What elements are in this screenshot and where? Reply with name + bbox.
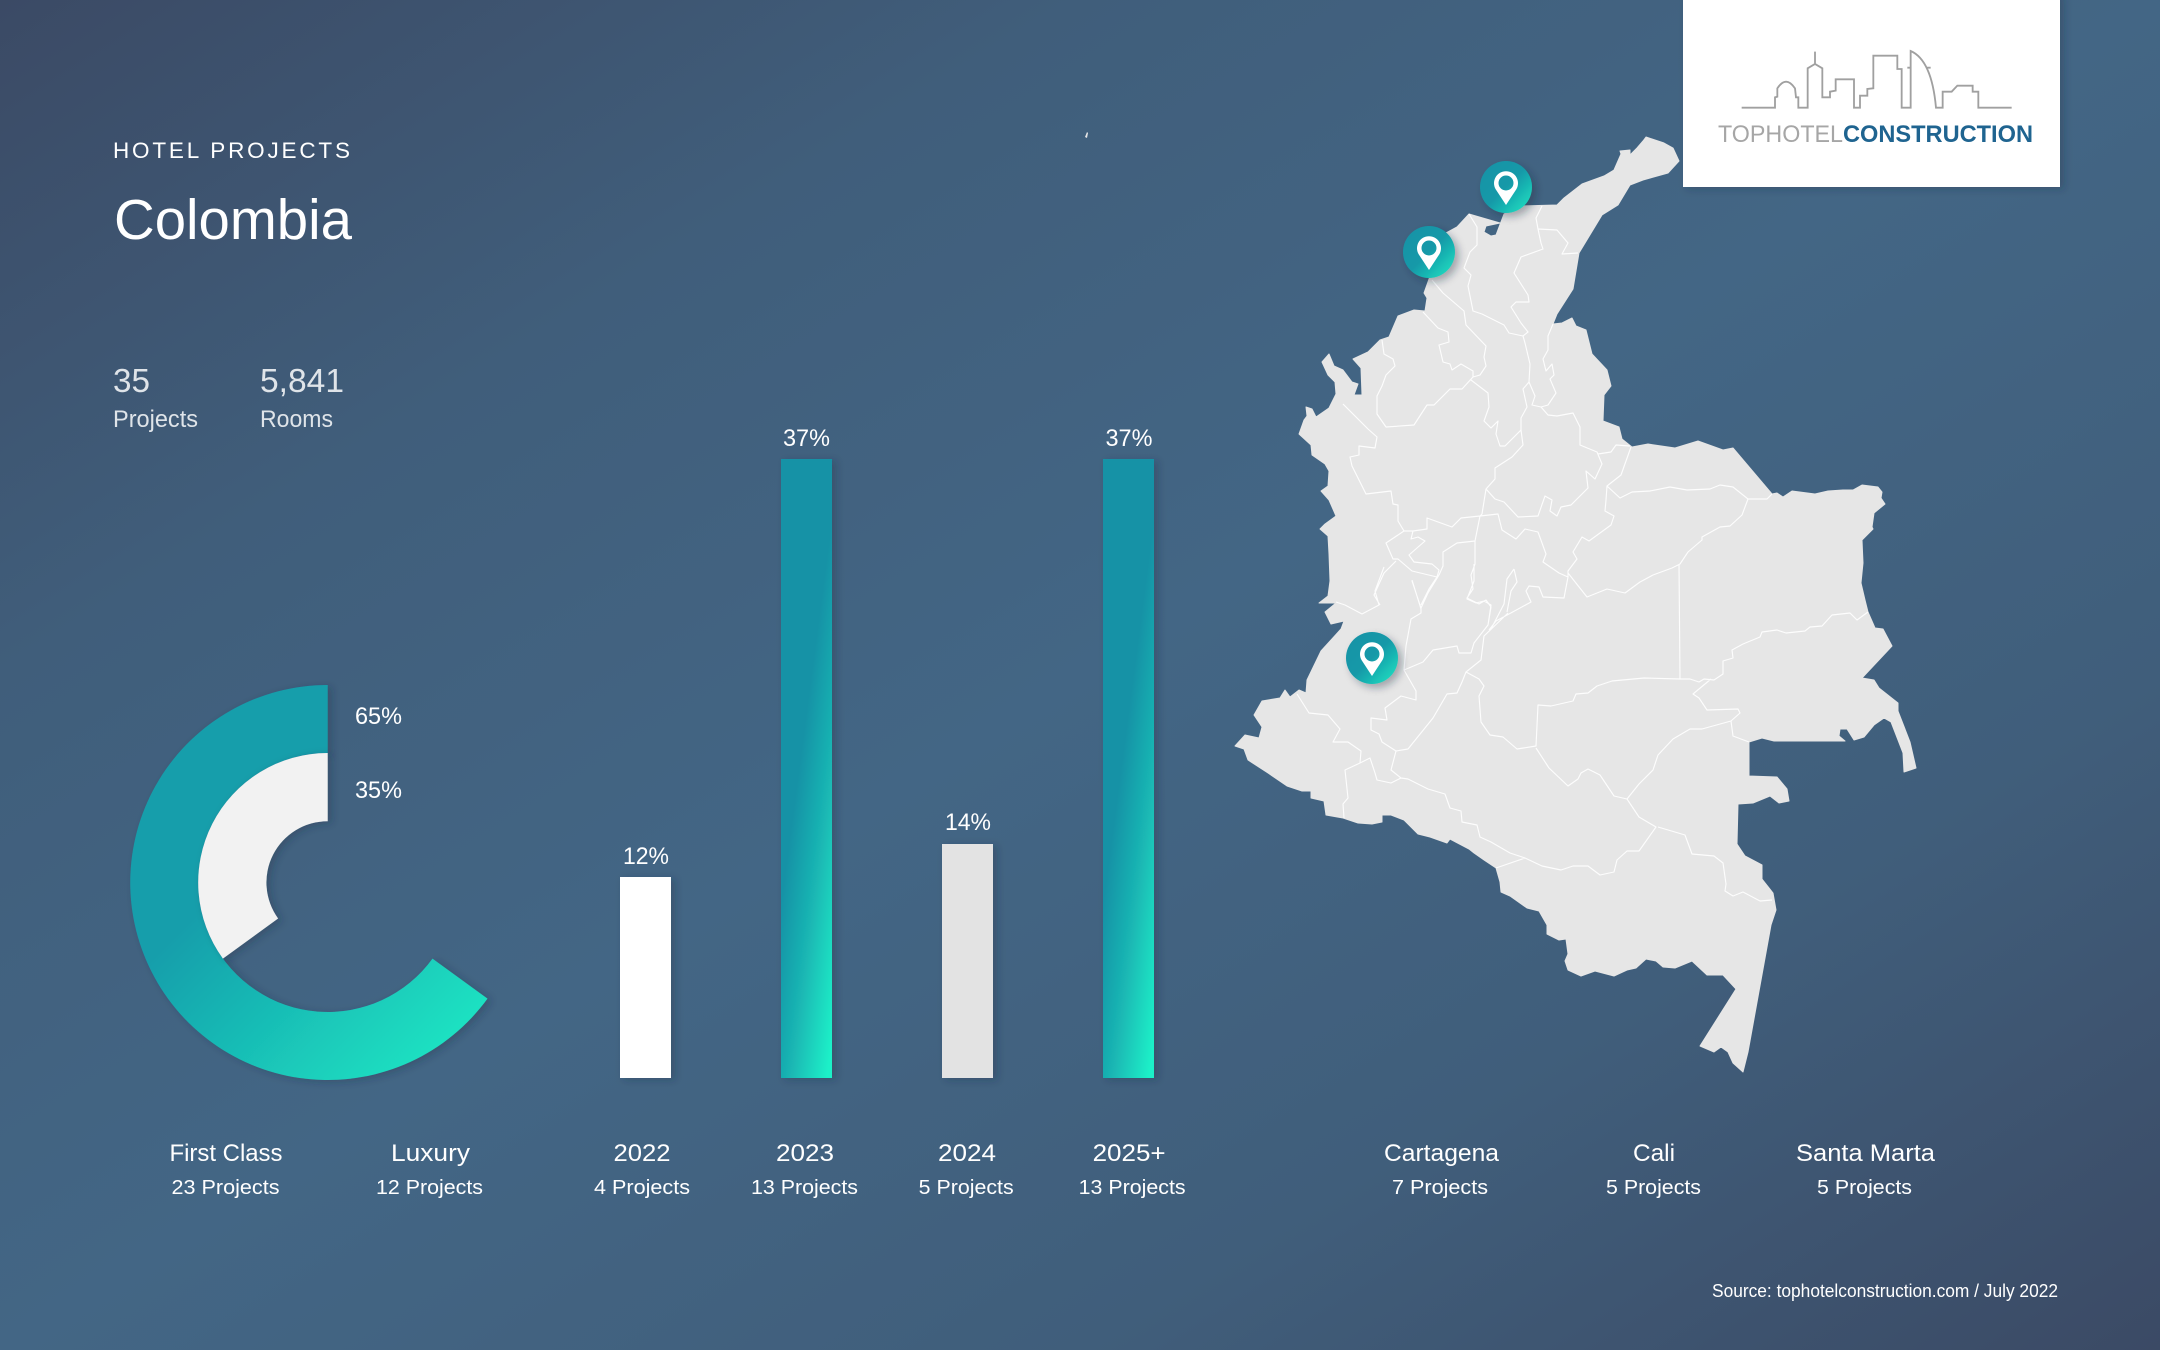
- label: Luxury: [376, 1140, 483, 1199]
- stat: rooms: 5,841: [260, 362, 344, 399]
- stat: projects: [113, 362, 198, 433]
- bar 2022: 12%: [623, 843, 669, 870]
- donut value 65%: 65%: [355, 703, 402, 730]
- title: Colombia: Colombia: [114, 188, 352, 252]
- bar 2025+: [1103, 425, 1154, 1078]
- donut chart: hotel class: [130, 685, 487, 1080]
- bar 2023: [781, 425, 832, 1078]
- label: Luxury: 12 Projects: [376, 1176, 483, 1199]
- small map speck: [1085, 132, 1088, 138]
- label: 2025+: [1079, 1140, 1186, 1199]
- label: First Class: First Class: [170, 1140, 282, 1167]
- country outline: [1235, 137, 1916, 1072]
- heading block: [113, 138, 352, 252]
- bar 2024: [942, 809, 993, 1078]
- label: Luxury: Luxury: [391, 1140, 470, 1167]
- label: 2024: [919, 1140, 1014, 1199]
- label: 2024: 2024: [938, 1140, 996, 1167]
- label: Santa Marta: Santa Marta: [1796, 1140, 1936, 1167]
- label: 2022: [594, 1140, 690, 1199]
- bar 2023: 37%: [783, 425, 830, 452]
- stat: projects: 35: [113, 362, 150, 399]
- label: Cali: Cali: [1633, 1140, 1675, 1167]
- label: 2023: 13 Projects: [751, 1176, 858, 1199]
- label: Santa Marta: 5 Projects: [1817, 1176, 1912, 1199]
- label: 2023: 2023: [776, 1140, 834, 1167]
- label: Cartagena: 7 Projects: [1392, 1176, 1488, 1199]
- stat: rooms: [260, 362, 344, 433]
- label: 2025+: 13 Projects: [1079, 1176, 1186, 1199]
- label: Cartagena: Cartagena: [1384, 1140, 1500, 1167]
- bar 2024: 14%: [945, 809, 991, 836]
- label: Santa Marta: [1796, 1140, 1936, 1199]
- map pin: Cartagena: [1403, 226, 1455, 278]
- label: 2023: [751, 1140, 858, 1199]
- logo wordmark: CONSTRUCTION: [1843, 121, 2033, 148]
- donut segment: first class 65%: [130, 685, 487, 1080]
- stat: projects: Projects: [113, 406, 198, 433]
- bar 2025+: 37%: [1106, 425, 1152, 452]
- donut segment: luxury 35%: [198, 753, 328, 959]
- label: 2024: 5 Projects: [919, 1176, 1014, 1199]
- label: First Class: [170, 1140, 282, 1199]
- label: Cali: 5 Projects: [1606, 1176, 1701, 1199]
- label: 2025+: 2025+: [1093, 1140, 1166, 1167]
- label: Cartagena: [1384, 1140, 1500, 1199]
- map of Colombia: [1235, 137, 1916, 1072]
- bar 2022: [620, 843, 671, 1078]
- department borders: [1297, 206, 1868, 901]
- donut value 35%: 35%: [355, 777, 402, 804]
- map pin: Cali: [1346, 632, 1398, 684]
- logo skyline icon: [1742, 51, 2012, 108]
- map pin: Santa Marta: [1480, 161, 1532, 213]
- label: 2022: 2022: [614, 1140, 670, 1167]
- stat: rooms: Rooms: [260, 406, 333, 433]
- eyebrow: hotel projects: HOTEL PROJECTS: [113, 138, 350, 163]
- label: First Class: 23 Projects: [172, 1176, 280, 1199]
- bar chart: opening year: [620, 425, 1154, 1078]
- label: Cali: [1606, 1140, 1701, 1199]
- label: 2022: 4 Projects: [594, 1176, 690, 1199]
- logo panel: [1683, 0, 2060, 187]
- logo wordmark: TOPHOTEL: [1718, 121, 1843, 148]
- source note: Source: tophotelconstruction.com / July 2022: [1712, 1281, 2058, 1301]
